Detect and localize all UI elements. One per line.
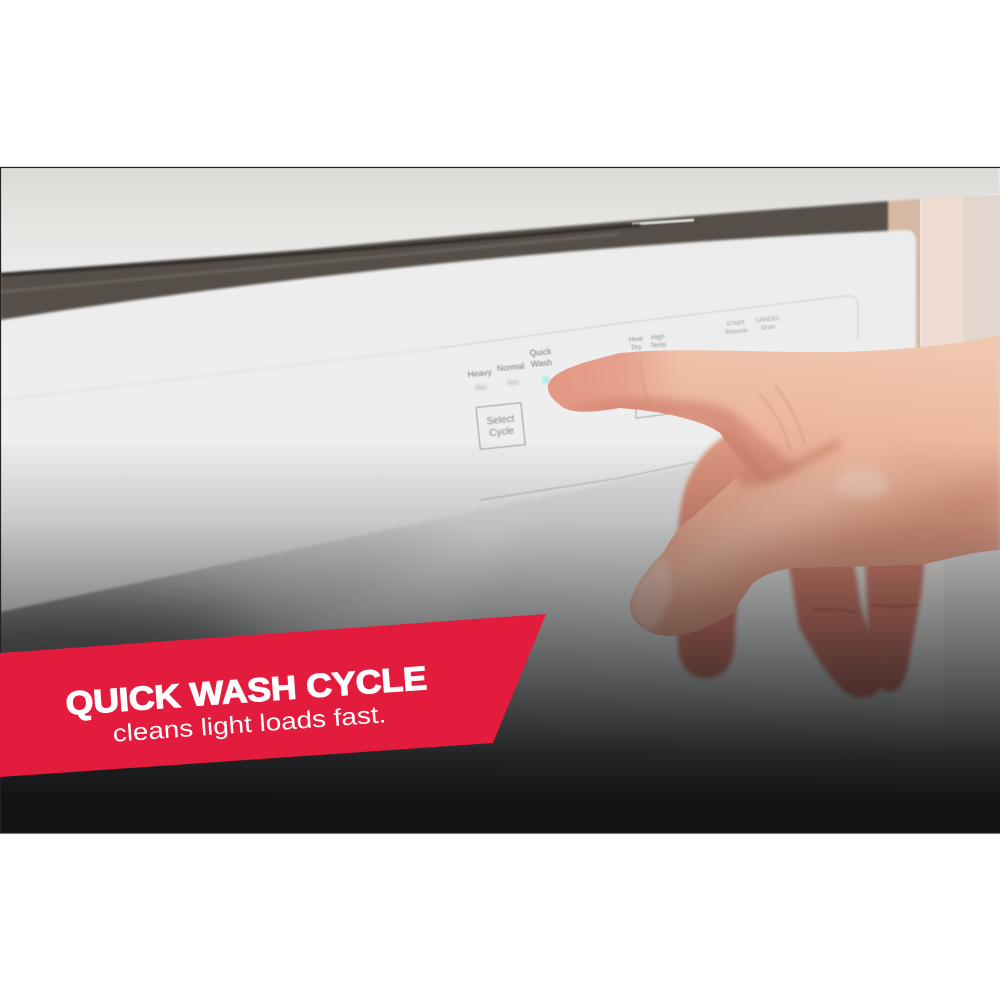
label: START Resume [725,320,748,334]
label: High Temp: Temp [650,341,667,350]
Select Cycle button: Select [486,414,515,427]
label: High Temp [650,334,667,348]
second button hidden by finger [636,408,668,418]
banner: red ribbon with headline [0,614,546,777]
label: Quick Wash: Quick [529,346,552,358]
label: Heavy: Heavy [467,367,493,379]
label: Quick Wash: Wash [530,357,553,369]
heading: QUICK WASH CYCLE: QUICK WASH CYCLE [64,659,428,722]
dark gradient overlay [0,430,1000,840]
knuckle highlight [836,471,888,499]
label: High Temp: High [651,333,665,342]
label: Heat Dry: Heat [629,335,643,344]
cabinet frame at right [886,190,1000,716]
door light reflection [384,603,410,620]
index finger underside shading [560,398,800,490]
Select Cycle button: Cycle [489,426,515,439]
control strip inset outline [440,296,858,348]
thumb nail [630,556,672,632]
finger joint creases [812,604,918,613]
red ribbon [0,614,546,777]
trim shadow line [0,225,640,275]
door dark reflection [1,574,269,653]
middle finger [675,435,745,680]
hand [540,330,1000,697]
white dishwasher panel [0,230,916,612]
infographic canvas [0,166,1000,834]
Select Cycle button [476,403,525,449]
label: Quick Wash [529,348,552,368]
label: CANCEL Drain: CANCEL [755,316,781,324]
pinky finger [865,555,925,692]
thumb highlight [673,458,878,593]
label: Heat Dry: Dry [631,343,643,351]
countertop [0,168,1000,273]
lower panel edge line [480,462,695,500]
label: START Resume: Resume [725,328,749,336]
control labels [467,316,782,379]
crease between index base and thumb [722,432,840,480]
photo: dishwasher control panel with hand [0,168,1000,840]
knuckle creases [641,360,805,450]
label: START Resume: START [726,320,746,328]
hand and index finger [540,330,1000,650]
label: Heat Dry [628,336,643,350]
dark gap under the countertop [0,196,888,325]
subheading: cleans light loads fast.: cleans light loads fast. [112,701,387,748]
photo frame [0,168,1000,833]
label: CANCEL Drain [755,316,780,330]
indicator lights [475,376,550,390]
label: CANCEL Drain: Drain [761,324,776,332]
ring finger [788,555,885,697]
left panel faded inset line [0,348,440,400]
back of hand lower shading [847,474,1000,560]
label: Normal: Normal [497,361,525,373]
shine on dark trim [632,220,694,224]
stainless door below panel [1,465,880,748]
trim highlight line [0,234,620,292]
index fingertip colouring [548,351,662,412]
